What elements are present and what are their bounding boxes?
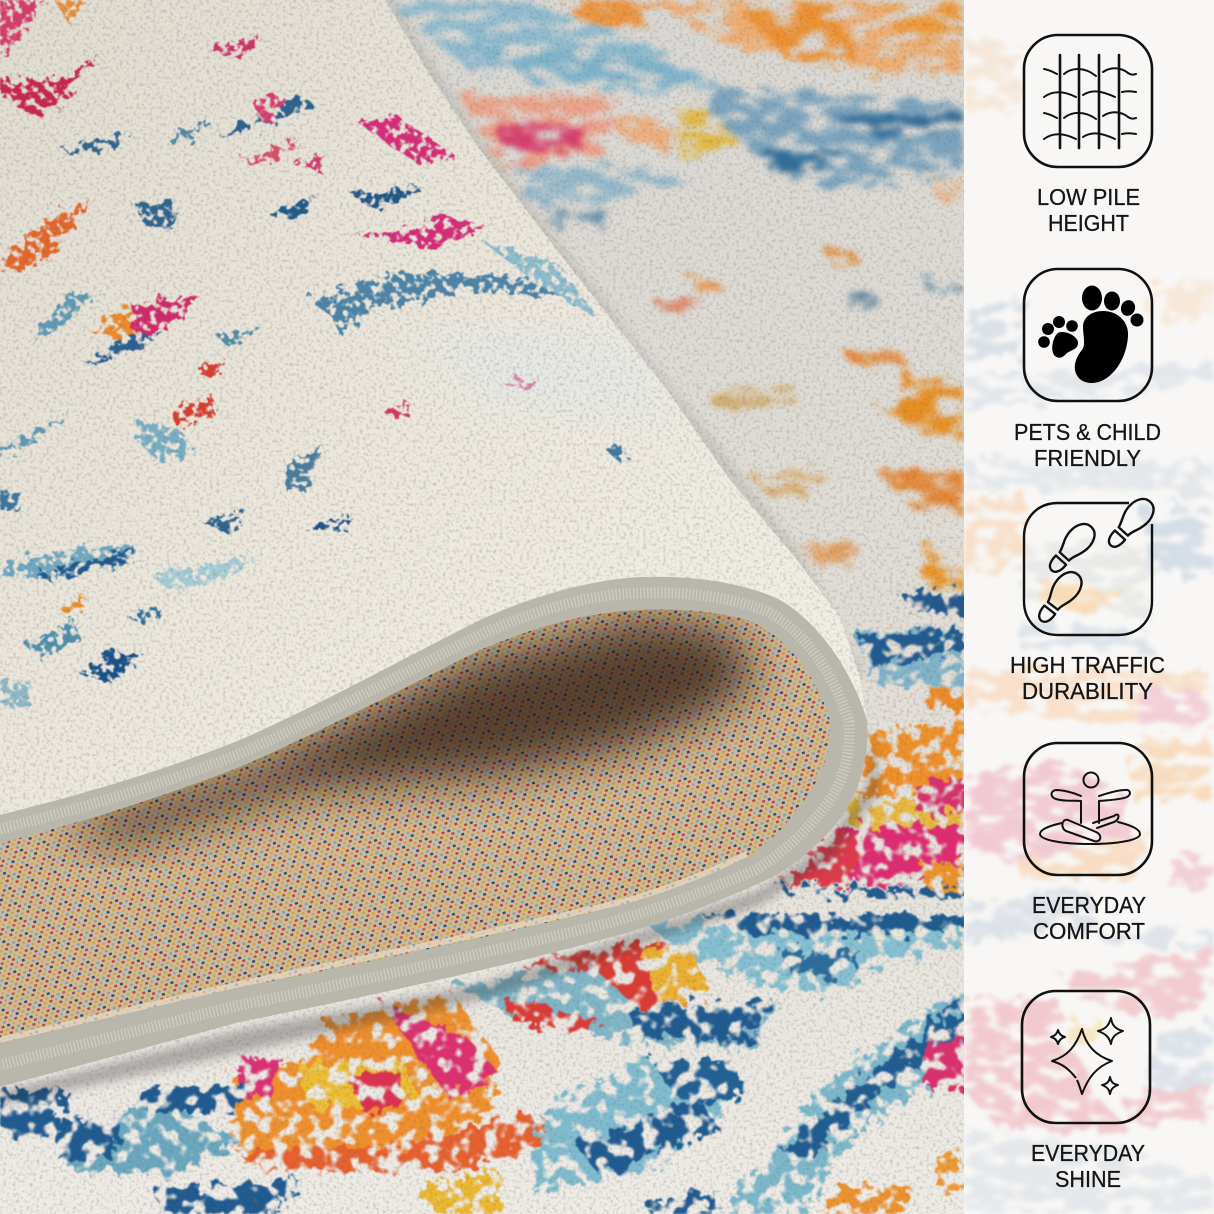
label: everyday shine: EVERYDAY [1031,1140,1145,1166]
floor shadow under the roll [0,730,880,1105]
rug top: rolled face [0,0,867,815]
carpet grain overlay [0,0,964,1214]
rug top: colour flecks [0,0,625,705]
icon: high traffic durability [1024,493,1159,635]
label: pets and child friendly: PETS & CHILD [1014,419,1161,445]
rug binding edge [0,577,868,1087]
rug top: cool highlight [502,357,651,392]
label: everyday shine [1031,1140,1145,1192]
label: high traffic durability: DURABILITY [1022,678,1153,704]
floor rug near pattern, in focus [0,590,964,1214]
label: low pile height: LOW PILE [1037,184,1140,210]
shadow along rug silhouette [385,0,860,677]
floor rug base [0,0,964,1214]
label: pets and child friendly [1014,419,1161,471]
panel: right feature column [964,0,1214,1214]
photo: rolled rug corner [0,0,964,1214]
icon: everyday comfort [1024,743,1152,875]
label: everyday comfort: COMFORT [1033,918,1145,944]
rug back: woven underside [0,590,850,1060]
label: everyday shine: SHINE [1055,1166,1121,1192]
label: high traffic durability [1010,652,1165,704]
icon: pets and child friendly [1024,269,1152,401]
icon: everyday shine [1022,991,1150,1123]
label: low pile height [1037,184,1140,236]
label: pets and child friendly: FRIENDLY [1034,445,1141,471]
label: low pile height: HEIGHT [1048,210,1129,236]
icon: low pile height [1024,35,1152,167]
floor rug far pattern, out of focus [380,0,964,590]
label: high traffic durability: HIGH TRAFFIC [1010,652,1165,678]
label: everyday comfort: EVERYDAY [1032,892,1146,918]
label: everyday comfort [1032,892,1146,944]
panel washed pattern [964,40,1214,1214]
